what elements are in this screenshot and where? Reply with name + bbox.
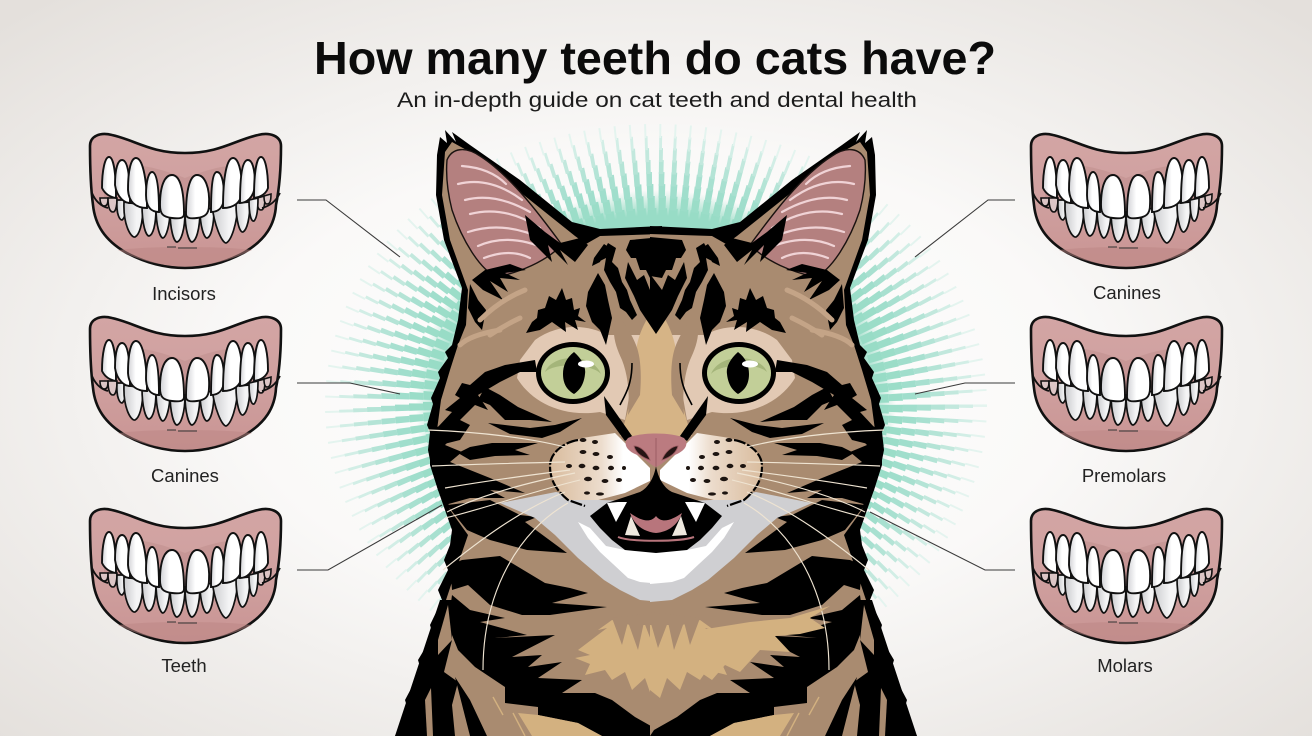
connector: premolars — [915, 383, 1015, 394]
cat illustration — [395, 130, 917, 736]
tooth icon: canines right — [1031, 134, 1222, 268]
title: How many teeth do cats have? — [314, 32, 996, 84]
label: premolars: Premolars — [1082, 465, 1166, 486]
tooth icon: incisors — [90, 134, 281, 268]
label: incisors: Incisors — [152, 283, 216, 304]
subtitle: An in-depth guide on cat teeth and dental health — [397, 88, 917, 112]
label: canines left: Canines — [151, 465, 219, 486]
mouth — [590, 466, 722, 553]
tooth icon: premolars — [1031, 317, 1222, 451]
tooth icon: molars — [1031, 509, 1222, 643]
label: canines right: Canines — [1093, 282, 1161, 303]
tooth icon: teeth — [90, 509, 281, 643]
label: teeth: Teeth — [161, 655, 207, 676]
connector: teeth — [297, 505, 442, 570]
connector: canines right — [915, 200, 1015, 257]
connector: canines left — [297, 383, 400, 394]
nose — [626, 434, 686, 467]
eye highlights — [578, 360, 758, 368]
connector: incisors — [297, 200, 400, 257]
nose nostrils — [634, 438, 678, 466]
connector: molars — [870, 512, 1015, 570]
radiating teal sunburst — [332, 131, 980, 679]
label: molars: Molars — [1097, 655, 1153, 676]
tan chest extension — [700, 606, 830, 680]
tooth icon: canines left — [90, 317, 281, 451]
